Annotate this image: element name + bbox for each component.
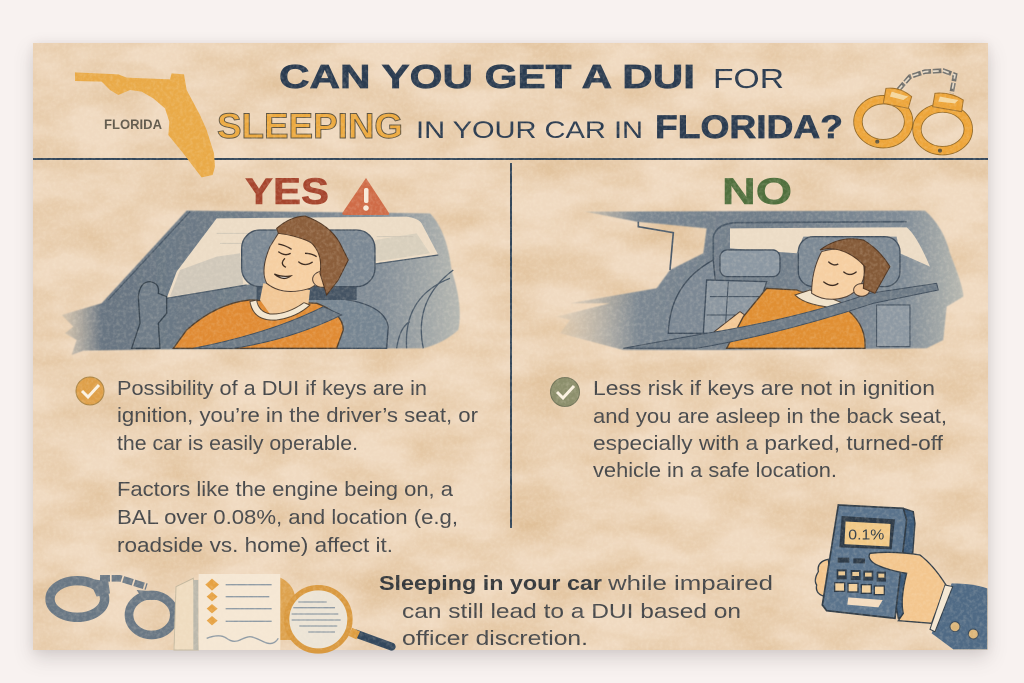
- head: [812, 249, 864, 299]
- icon: Florida state map: [75, 72, 215, 177]
- callout: bottom note: can still lead to a DUI based on: [402, 600, 741, 623]
- title: SLEEPING: [217, 107, 403, 146]
- door panel: [877, 305, 910, 347]
- text block: yes factors: Factors like the engine being on, a: [117, 478, 454, 501]
- gloved hand on wheel: [132, 282, 167, 348]
- text block: no conditions: and you are asleep in the back seat,: [593, 405, 947, 428]
- icon: warning triangle: [342, 178, 389, 215]
- icon: breathalyzer held in hand: [815, 505, 987, 649]
- front hand: [869, 552, 946, 623]
- text block: no conditions: [593, 377, 947, 482]
- text block: yes factors: BAL over 0.08%, and location (e.g,: [117, 506, 458, 529]
- text block: yes conditions: [117, 377, 478, 455]
- head: [264, 233, 325, 292]
- callout: bottom note: officer discretion.: [402, 627, 588, 650]
- display reading: 0.1%: [848, 526, 884, 543]
- text block: no conditions: Less risk if keys are not in ignition: [593, 377, 935, 400]
- title: FOR: [713, 63, 784, 94]
- shirt: [727, 288, 865, 348]
- label: Florida: FLORIDA: [104, 117, 162, 132]
- shirt: [173, 300, 343, 348]
- seat belt: [193, 307, 342, 348]
- arm: [710, 312, 752, 337]
- back fingers: [815, 559, 832, 596]
- callout: bottom note: [379, 572, 773, 650]
- icon: orange handcuffs: [858, 71, 968, 153]
- illustration: man asleep in driver's seat: [62, 211, 460, 355]
- callout: bottom note: while impaired: [607, 572, 773, 595]
- icon: checklist document: [174, 574, 295, 650]
- icon: magnifying glass: [287, 588, 392, 651]
- heading: No: NO: [722, 171, 792, 212]
- text block: yes conditions: ignition, you’re in the driver’s seat, or: [117, 404, 478, 427]
- icon: no check badge: [550, 378, 580, 406]
- text block: yes conditions: the car is easily operable.: [117, 432, 358, 455]
- text block: yes factors: [117, 478, 458, 557]
- text block: no conditions: vehicle in a safe location.: [593, 459, 837, 482]
- heading: Yes: YES: [245, 171, 329, 212]
- device: [893, 508, 915, 618]
- icon: yes check badge: [76, 377, 104, 405]
- icon: grey handcuffs: [50, 578, 174, 635]
- text block: no conditions: especially with a parked, turned-off: [593, 432, 943, 455]
- title: IN YOUR CAR IN: [416, 117, 643, 144]
- illustration: man asleep in back seat: [557, 211, 963, 350]
- sleeve: [932, 583, 987, 649]
- callout: bottom note: Sleeping in your car: [379, 572, 602, 595]
- text block: yes factors: roadside vs. home) affect it.: [117, 534, 393, 557]
- rear seat: [668, 260, 720, 333]
- text block: yes conditions: Possibility of a DUI if keys are in: [117, 377, 427, 400]
- title: FLORIDA?: [655, 109, 843, 145]
- title: CAN YOU GET A DUI: [279, 58, 695, 95]
- seat: [303, 297, 388, 348]
- title: [217, 58, 843, 146]
